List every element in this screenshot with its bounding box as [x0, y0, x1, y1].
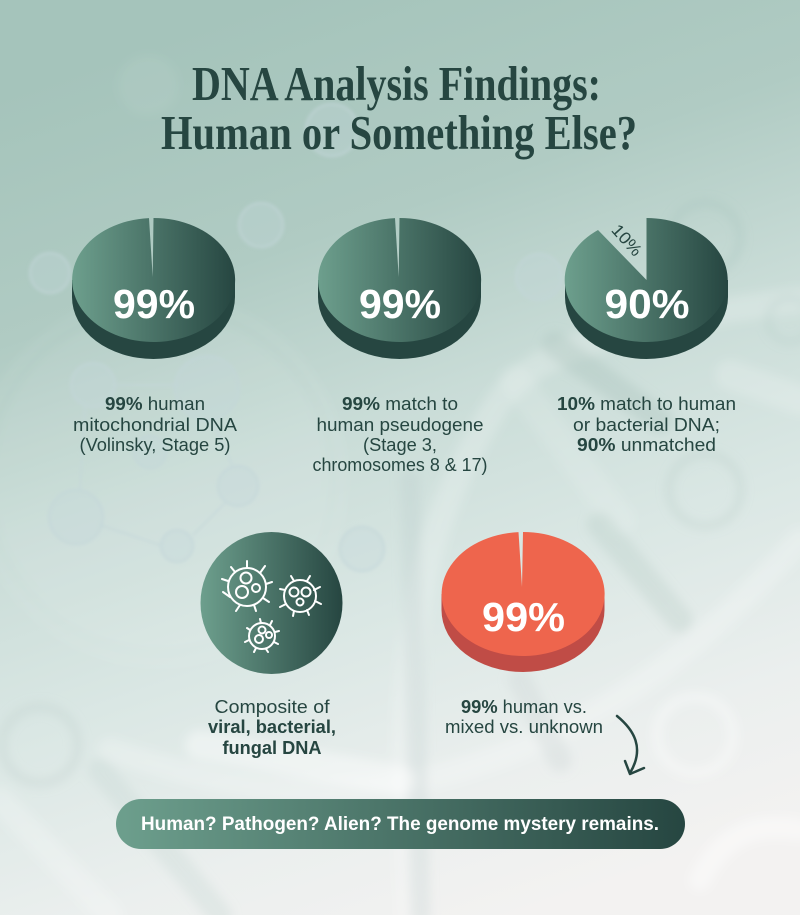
caption: [445, 697, 603, 737]
panel: mitochondrial DNA: [72, 218, 237, 455]
panel: human pseudogene: [312, 218, 488, 475]
pie chart: 99%: [72, 218, 235, 359]
caption: Composite of: [214, 697, 331, 717]
caption: 99% human vs.: [461, 697, 587, 717]
panel: unmatched DNA: [557, 218, 736, 455]
caption: chromosomes 8 & 17): [312, 455, 488, 475]
title: Human or Something Else?: [161, 105, 637, 160]
pie chart: 99%: 99%: [113, 281, 195, 327]
caption: [557, 394, 736, 455]
pie chart: 99%: [318, 218, 481, 359]
caption: 99% match to: [342, 394, 458, 414]
caption: 99% human: [105, 394, 205, 414]
arrow: [617, 716, 644, 774]
panel: human vs mixed vs unknown: [442, 532, 605, 737]
caption: 10% match to human: [557, 394, 736, 414]
slice label: 10%: 10%: [608, 221, 646, 260]
panel: composite DNA: [200, 532, 342, 758]
title: [161, 56, 637, 160]
caption: or bacterial DNA;: [573, 415, 720, 435]
callout: [116, 799, 685, 849]
caption: mitochondrial DNA: [73, 415, 237, 435]
pie chart: 99%: 99%: [359, 281, 441, 327]
icon: microbes: [200, 532, 342, 674]
pie chart: 99% red: 99%: [482, 594, 565, 640]
caption: (Stage 3,: [363, 435, 437, 455]
caption: mixed vs. unknown: [445, 717, 603, 737]
caption: [312, 394, 488, 475]
caption: viral, bacterial,: [208, 717, 336, 737]
caption: (Volinsky, Stage 5): [80, 435, 231, 455]
caption: [208, 697, 336, 758]
caption: human pseudogene: [316, 415, 484, 435]
pie chart: 99% red: [442, 532, 605, 672]
title: DNA Analysis Findings:: [192, 56, 601, 111]
pie chart: 90%: [565, 218, 728, 359]
caption: fungal DNA: [222, 738, 322, 758]
caption: [73, 394, 237, 455]
caption: 90% unmatched: [577, 435, 716, 455]
callout: Human? Pathogen? Alien? The genome mystery remains.: [141, 814, 659, 835]
pie chart: 90%: 90%: [604, 281, 690, 327]
